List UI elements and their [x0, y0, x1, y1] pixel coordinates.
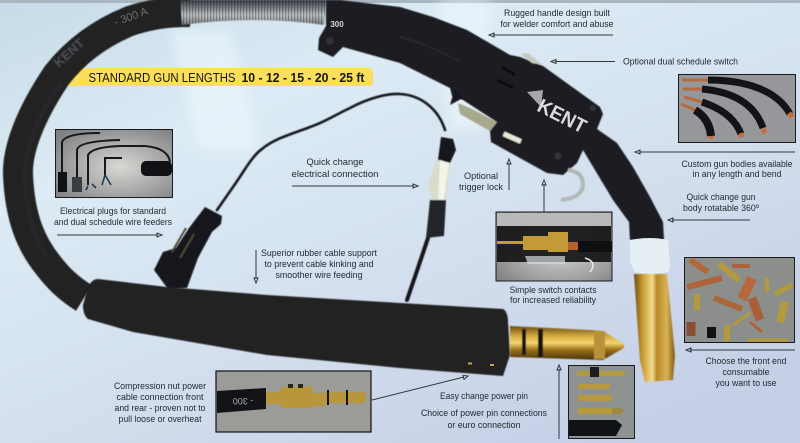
main power cable	[18, 12, 190, 298]
rear support holes	[468, 364, 494, 365]
rear rubber cable support	[83, 279, 510, 376]
photo: switch contacts	[496, 212, 612, 281]
caption: power pin: Choice of power pin connections	[421, 408, 547, 419]
front collar	[630, 238, 670, 274]
arrow: rugged handle	[489, 33, 613, 37]
caption: electrical plugs	[54, 206, 172, 228]
photo: electrical plugs	[56, 130, 172, 198]
caption: superior rubber cable support: smoother wire feeding	[276, 270, 362, 281]
caption: quick change electrical connection: electrical connection	[292, 169, 378, 180]
caption: trigger lock	[459, 171, 503, 193]
caption: superior rubber cable support: to prevent cable kinking and	[264, 259, 374, 270]
photo: compression nut	[216, 371, 371, 432]
trigger	[458, 103, 497, 131]
caption: consumables: consumable	[722, 367, 770, 378]
photo: consumables	[684, 258, 794, 342]
caption: compression nut: Compression nut power	[114, 381, 206, 392]
arrow: switch contacts	[542, 180, 546, 212]
caption: electrical plugs: and dual schedule wire feeders	[54, 217, 172, 228]
arrow: dual schedule switch	[551, 60, 615, 64]
caption: dual schedule switch: Optional dual schedule switch	[623, 56, 738, 68]
KENT logo: KENT	[534, 95, 590, 138]
caption: rugged handle	[500, 8, 614, 30]
caption: power pin: Easy change power pin	[440, 391, 528, 402]
caption: power pin: or euro connection	[448, 420, 520, 431]
caption: compression nut	[114, 381, 206, 425]
caption: quick change gun body	[683, 192, 759, 214]
quick change connector	[426, 137, 456, 238]
caption: compression nut: and rear - proven not to	[114, 403, 206, 414]
caption: trigger lock: trigger lock	[459, 182, 503, 193]
caption: quick change gun body: body rotatable 360º	[683, 203, 759, 214]
caption: compression nut: cable connection front	[116, 392, 204, 403]
arrow: rotatable body	[668, 218, 750, 222]
arrow: trigger lock	[507, 159, 511, 190]
caption: switch contacts: for increased reliability	[510, 295, 596, 306]
caption: superior rubber cable support	[261, 248, 377, 281]
arrow: plugs to connector	[57, 233, 162, 237]
caption: electrical plugs: Electrical plugs for standard	[60, 206, 166, 217]
yellow banner: standard gun lengths: STANDARD GUN LENGTHS	[88, 71, 236, 85]
caption: quick change gun body: Quick change gun	[686, 192, 756, 203]
cable print 300: - 300 A	[113, 5, 150, 29]
arrow: power pin options	[557, 365, 561, 439]
caption: switch contacts	[510, 285, 597, 306]
caption: switch contacts: Simple switch contacts	[510, 285, 597, 296]
caption: rugged handle: for welder comfort and abuse	[500, 19, 614, 30]
nozzle	[634, 274, 675, 382]
dual schedule switch	[520, 53, 543, 65]
arrow: custom gun bodies	[635, 150, 795, 154]
caption: custom gun bodies	[682, 159, 792, 180]
caption: consumables: Choose the front end	[706, 356, 786, 367]
photo: gun bodies	[678, 74, 796, 142]
caption: quick change electrical connection	[292, 157, 378, 180]
photo: power pins	[568, 366, 634, 438]
photo: compression nut: - 300	[233, 396, 253, 406]
yellow banner: standard gun lengths	[65, 68, 373, 86]
caption: consumables	[706, 356, 786, 389]
gun handle	[318, 0, 664, 240]
indicator slot	[503, 132, 522, 144]
caption: power pin	[421, 391, 547, 431]
arrow: compression nut to rear	[372, 376, 468, 400]
caption: consumables: you want to use	[716, 378, 776, 389]
caption: rugged handle: Rugged handle design built	[504, 8, 610, 19]
trigger lock hook	[561, 170, 583, 200]
caption: trigger lock: Optional	[464, 171, 498, 182]
caption: custom gun bodies: Custom gun bodies available	[682, 159, 792, 170]
flexible spring strain relief	[180, 0, 326, 25]
handle 300 badge: 300	[330, 20, 344, 29]
caption: quick change electrical connection: Quick change	[306, 157, 364, 168]
caption: custom gun bodies: in any length and bend	[692, 169, 782, 180]
caption: superior rubber cable support: Superior rubber cable support	[261, 248, 377, 259]
caption: compression nut: pull loose or overheat	[118, 414, 202, 425]
control wire and electrical connectors	[154, 94, 456, 300]
arrow: electrical connection	[292, 184, 418, 188]
power pin	[510, 326, 624, 360]
arrow: cable support	[254, 250, 258, 283]
cable printing: KENT	[51, 35, 87, 70]
wire feeder plug	[154, 207, 222, 289]
yellow banner: standard gun lengths: 10 - 12 - 15 - 20 - 25 ft	[242, 71, 365, 85]
arrow: consumables	[686, 348, 795, 352]
